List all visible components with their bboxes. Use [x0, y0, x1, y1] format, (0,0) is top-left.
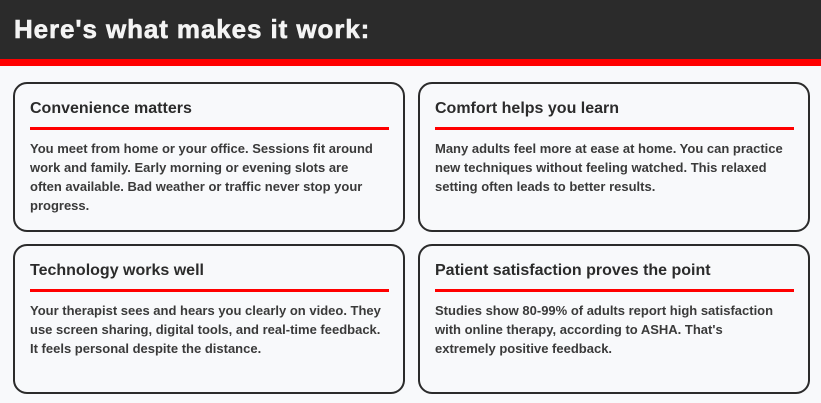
heading: Technology works well — [30, 262, 204, 279]
text block: new techniques without feeling watched. This relaxed — [435, 160, 767, 175]
text block: Studies show 80-99% of adults report high satisfaction — [435, 303, 773, 318]
text block — [30, 141, 373, 213]
text block: work and family. Early morning or evening slots are — [30, 160, 348, 175]
text block — [435, 303, 773, 356]
text block: extremely positive feedback. — [435, 341, 612, 356]
header — [0, 0, 821, 66]
text block: It feels personal despite the distance. — [30, 341, 261, 356]
heading: Convenience matters — [30, 100, 192, 117]
text block: use screen sharing, digital tools, and real-time feedback. — [30, 322, 380, 337]
panel: satisfaction — [418, 244, 810, 394]
text block: progress. — [30, 198, 89, 213]
text block: with online therapy, according to ASHA. That's — [435, 322, 723, 337]
heading: Patient satisfaction proves the point — [435, 262, 711, 279]
panel: convenience — [13, 82, 405, 232]
heading: Comfort helps you learn — [435, 100, 619, 117]
panel: comfort — [418, 82, 810, 232]
header: Here's what makes it work: — [14, 14, 370, 44]
text block: Many adults feel more at ease at home. You can practice — [435, 141, 783, 156]
panel: technology — [13, 244, 405, 394]
text block — [435, 141, 783, 194]
text block: Your therapist sees and hears you clearly on video. They — [30, 303, 381, 318]
text block — [30, 303, 381, 356]
text block: often available. Bad weather or traffic never stop your — [30, 179, 362, 194]
text block: You meet from home or your office. Sessions fit around — [30, 141, 373, 156]
text block: setting often leads to better results. — [435, 179, 655, 194]
